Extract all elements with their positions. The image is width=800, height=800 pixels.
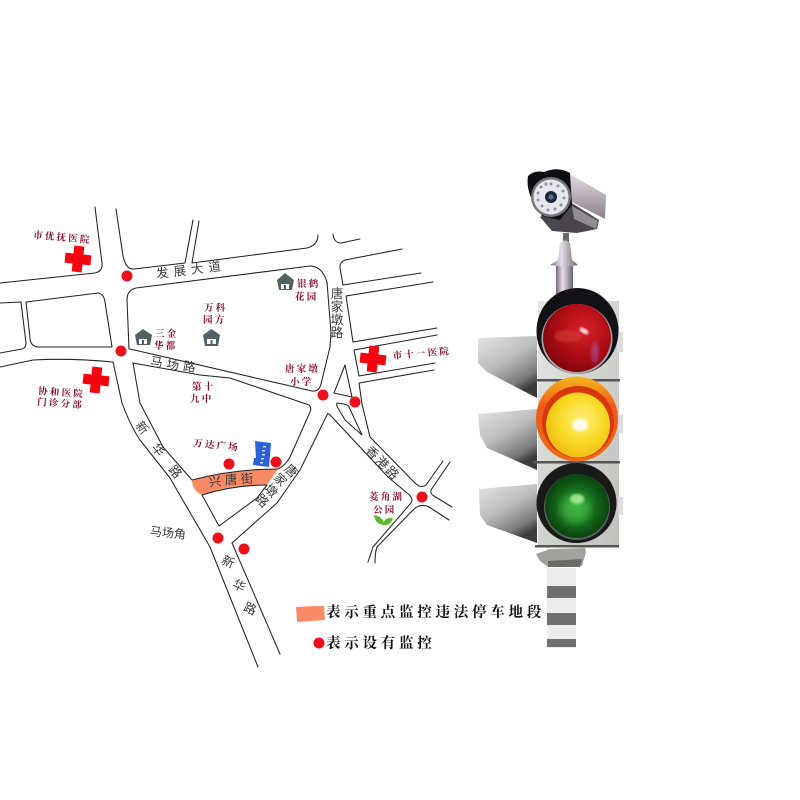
road name: 新华路 south: 路 <box>241 599 259 618</box>
label: 市十一医院: 市十一医院 <box>392 345 452 362</box>
label: 万科园方 <box>203 302 227 326</box>
road name: 新华路 north: 新 <box>133 418 152 437</box>
road name: 唐家墩路 south: 路 <box>253 491 272 511</box>
label: 第十九中: 第十 <box>192 381 215 393</box>
icon: residence 三金华都 <box>135 329 152 345</box>
signal visor: lower <box>479 484 537 543</box>
label: 三金华都: 三金 <box>155 328 178 340</box>
label: 第十九中: 九中 <box>190 393 213 405</box>
label: 菱角湖公园: 菱角湖 <box>369 491 404 503</box>
label: 唐家墩小学: 小学 <box>290 376 313 388</box>
road name: 新华路 north: 华 <box>149 440 168 459</box>
legend text: key section: 表示重点监控违法停车地段 <box>326 603 545 621</box>
road network <box>0 207 452 667</box>
road name: 新华路 south <box>219 552 259 618</box>
icon: park leaves <box>374 515 393 525</box>
highlighted road section: 兴唐街: 街 <box>240 472 254 486</box>
signal visor: upper <box>478 336 537 398</box>
road name: 香港路: 路 <box>383 463 402 483</box>
road name: 唐家墩路 north: 路 <box>331 325 344 340</box>
label: 银鹤花园 <box>295 278 320 303</box>
place name: 马场角: 马场角 <box>149 524 187 542</box>
road name: 新华路 north <box>133 418 185 482</box>
label: 第十九中 <box>190 381 215 405</box>
highlighted road section: 兴唐街: 唐 <box>224 472 238 487</box>
label: 三金华都 <box>154 328 178 352</box>
red lamp <box>536 288 618 374</box>
label: 协和医院门诊分部: 门诊分部 <box>37 396 84 411</box>
road name: 新华路 south: 新 <box>219 552 237 571</box>
icon: hospital cross 市十一医院 <box>359 345 387 373</box>
legend <box>296 603 545 652</box>
road name: 唐家墩路 north: 墩 <box>331 313 344 327</box>
label: 万科园方: 园方 <box>203 314 226 326</box>
legend dot: monitoring point <box>314 638 324 648</box>
icon: residence 万科园方 <box>203 329 220 346</box>
monitoring point markers <box>116 270 428 554</box>
signal visor: middle <box>478 409 537 470</box>
surveillance camera <box>528 169 606 242</box>
road name: 唐家墩路 south: 家 <box>271 470 290 490</box>
green lamp <box>536 463 616 543</box>
label: 万达广场: 万达广场 <box>193 437 240 454</box>
label: 银鹤花园: 银鹤 <box>297 278 320 290</box>
label: 万科园方: 万科 <box>204 302 227 314</box>
legend swatch: key monitored section <box>296 606 325 622</box>
label: 菱角湖公园: 公园 <box>373 505 396 516</box>
road name: 唐家墩路 north <box>331 286 344 340</box>
traffic light assembly <box>478 288 623 548</box>
road name: 唐家墩路 south <box>253 461 301 511</box>
road name: 香港路: 港 <box>373 454 392 473</box>
road name: 发展大道: 发展大道 <box>155 258 227 281</box>
mount pole <box>550 240 578 294</box>
icon: residence 银鹤花园 <box>277 273 294 290</box>
road name: 唐家墩路 south: 墩 <box>262 482 281 501</box>
road name: 香港路 <box>363 444 402 483</box>
road name: 新华路 north: 路 <box>166 462 185 482</box>
signal housing <box>533 301 623 548</box>
road name: 唐家墩路 south: 唐 <box>282 461 301 480</box>
label: 银鹤花园: 花园 <box>295 291 318 303</box>
camera lens <box>531 177 571 217</box>
road name: 新华路 south: 华 <box>230 576 248 595</box>
yellow lamp <box>536 376 618 462</box>
camera body <box>566 172 606 219</box>
road name: 唐家墩路 north: 家 <box>331 299 344 314</box>
icon: hospital cross 市优抚医院 <box>64 245 92 273</box>
highlighted road section: 兴唐街 <box>192 469 278 495</box>
label: 唐家墩小学 <box>285 363 320 388</box>
label: 协和医院门诊分部: 协和医院 <box>38 385 85 400</box>
label: 唐家墩小学: 唐家墩 <box>285 363 320 375</box>
label: 三金华都: 华都 <box>154 340 177 352</box>
label: 协和医院门诊分部 <box>37 385 85 411</box>
label: 菱角湖公园 <box>369 491 404 516</box>
label: 市优抚医院: 市优抚医院 <box>33 229 92 246</box>
camera hood <box>528 169 572 220</box>
road name: 马场路: 马场路 <box>149 354 200 375</box>
support pole with stripes <box>536 548 586 648</box>
road name: 唐家墩路 north: 唐 <box>331 286 343 301</box>
icon: hospital cross 协和医院 <box>82 366 110 394</box>
legend text: monitoring point: 表示设有监控 <box>326 634 436 652</box>
road name: 香港路: 香 <box>363 444 382 463</box>
camera mount <box>563 233 569 242</box>
icon: Wanda Plaza building <box>253 441 271 467</box>
highlighted road section: 兴唐街: 兴 <box>208 474 222 490</box>
